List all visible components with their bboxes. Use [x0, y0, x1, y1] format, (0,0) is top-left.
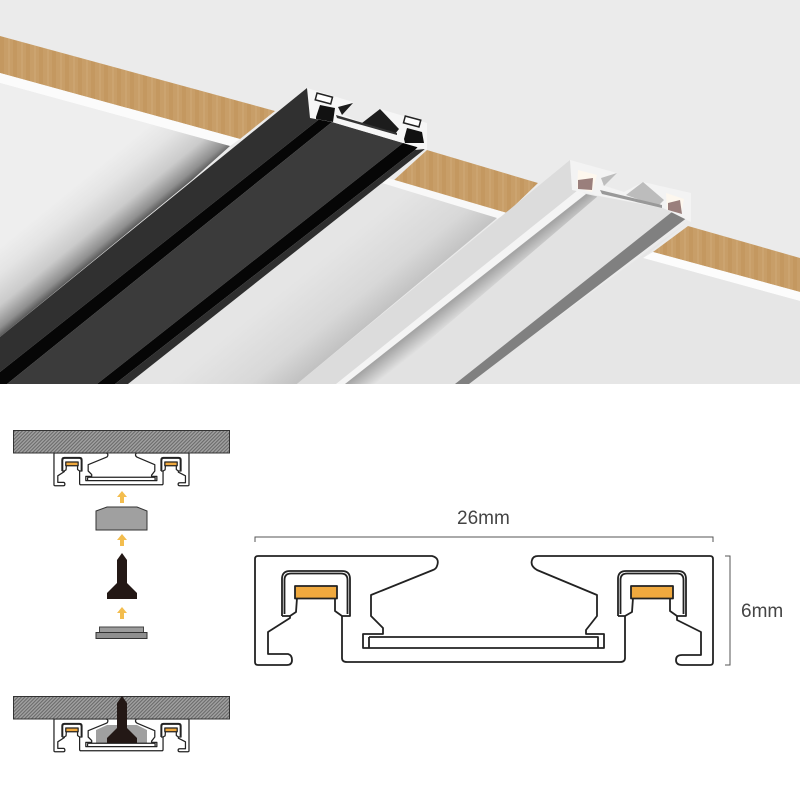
- white rail side: [297, 160, 578, 384]
- wood batten right: [653, 226, 800, 292]
- black rail left channel: [0, 117, 332, 384]
- arrow up 3: [117, 607, 127, 619]
- mounting block: [96, 507, 147, 530]
- black rail slot: [336, 115, 397, 135]
- screw: [107, 553, 137, 599]
- panel: ceiling installation photo: [0, 0, 800, 384]
- white rail end right cavity: [626, 182, 664, 206]
- hatched ceiling slab bottom: [14, 696, 230, 719]
- hatched ceiling slab top: [14, 430, 230, 453]
- large profile cross-section: [255, 556, 713, 665]
- white rail left cavity tint: [578, 178, 593, 190]
- white rail end plate: [570, 160, 691, 222]
- arrow up 2: [117, 534, 127, 546]
- black track rail: [0, 88, 427, 384]
- panel: installation steps diagram: [14, 430, 230, 752]
- base plate: [96, 627, 147, 638]
- black rail left clip: [315, 93, 333, 104]
- white rail face: [378, 196, 663, 384]
- mounted block inside rail: [96, 725, 147, 743]
- white trim right: [643, 252, 800, 301]
- ceiling surface: [0, 0, 800, 384]
- black rail right channel: [97, 135, 424, 384]
- white rail right cavity tint: [668, 200, 682, 214]
- white rail right face: [455, 206, 680, 384]
- width dimension line: [255, 537, 713, 542]
- black rail lip: [115, 149, 425, 384]
- white trim left: [0, 73, 240, 146]
- white rail shadow channel: [345, 194, 600, 384]
- white rail right clip: [666, 193, 684, 214]
- arrow up 1: [117, 491, 127, 503]
- small rail profile bottom: [54, 719, 189, 752]
- white trim middle: [380, 178, 507, 219]
- black rail end plate: [307, 88, 427, 150]
- black rail right inner notch: [404, 128, 424, 143]
- black rail end left cavity: [338, 103, 353, 115]
- black rail right clip: [403, 116, 421, 127]
- mounted screw: [107, 696, 137, 743]
- white rail grey channel: [455, 208, 688, 384]
- black rail end right cavity: [362, 109, 399, 134]
- black rail side: [0, 88, 322, 372]
- white track rail: [297, 160, 691, 384]
- white rail left clip: [577, 170, 597, 192]
- black rail left inner notch: [316, 105, 335, 122]
- panel: dimensioned profile drawing: [255, 508, 783, 665]
- height label: 6mm: [741, 601, 783, 622]
- lower ceiling panel middle: [128, 183, 497, 384]
- white rail slot: [600, 190, 662, 208]
- width label: 26mm: [457, 508, 510, 529]
- white rail end left cavity: [601, 173, 617, 186]
- black rail face: [7, 122, 403, 384]
- small rail profile top: [54, 453, 189, 486]
- lower ceiling panel right: [467, 220, 800, 384]
- white rail highlight edge: [336, 190, 586, 384]
- wood batten middle: [393, 150, 538, 213]
- wood batten left: [0, 36, 275, 139]
- height dimension line: [725, 556, 730, 665]
- lower ceiling panel left: [0, 83, 230, 337]
